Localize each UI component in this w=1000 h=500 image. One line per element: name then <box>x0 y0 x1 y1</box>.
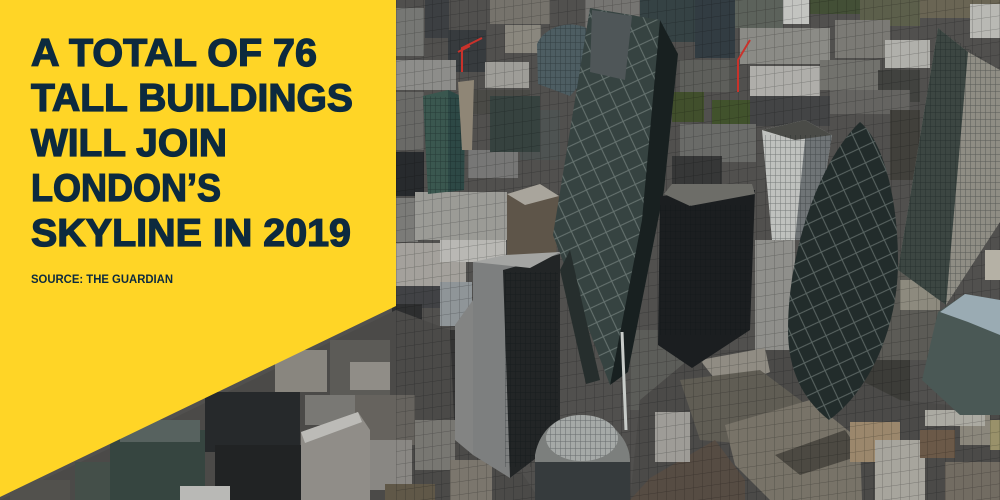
low-rise city blocks, top <box>396 0 1000 242</box>
tall tower with grey side, centre bottom <box>455 252 560 478</box>
low-rise city blocks, middle <box>392 192 940 420</box>
brown office block <box>507 184 559 260</box>
headline: SKYLINE IN 2019 <box>31 212 351 255</box>
curved glass building <box>537 25 586 96</box>
white tower <box>762 120 832 240</box>
headline: A TOTAL OF 76 <box>31 32 317 75</box>
30 St Mary Axe, the Gherkin <box>788 122 898 420</box>
green glass tower, left <box>423 80 474 194</box>
headline: WILL JOIN <box>31 122 227 165</box>
headline: LONDON’S <box>31 167 221 210</box>
yellow diagonal panel <box>0 0 396 497</box>
small-scale street texture <box>396 0 1000 500</box>
source line: SOURCE: THE GUARDIAN <box>31 274 173 286</box>
headline: TALL BUILDINGS <box>31 77 353 120</box>
glass building, far right <box>922 250 1000 415</box>
Leadenhall Building <box>553 8 678 385</box>
dark tower, centre <box>658 184 755 368</box>
red cranes <box>458 38 750 430</box>
right-hand glass tower <box>898 28 1000 305</box>
domed building, bottom <box>535 415 630 500</box>
low-rise city blocks, bottom <box>0 310 1000 500</box>
headline <box>31 32 353 255</box>
